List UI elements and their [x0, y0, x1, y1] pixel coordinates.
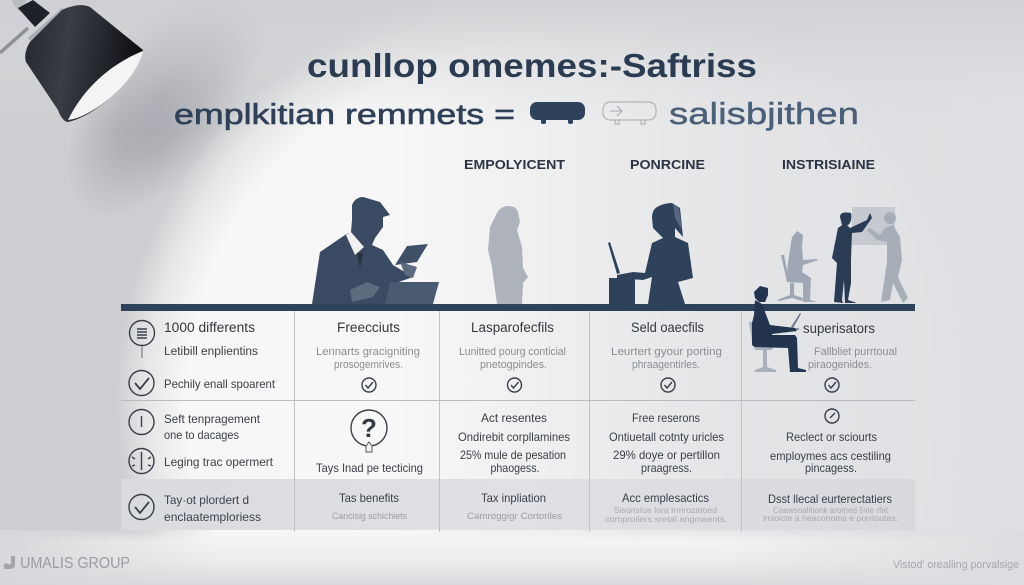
figure: seated grey woman — [777, 231, 818, 302]
icon: check — [129, 370, 154, 396]
icon: check — [362, 378, 376, 392]
cell note: Caewsoalitionk aromed 5vie rfat — [773, 505, 889, 515]
cell note: lmioicte a heaconoms e porrtoutes. — [763, 513, 898, 523]
icon: filled pill — [530, 102, 585, 124]
heading: column 3: INSTRISIAINE — [782, 157, 875, 172]
column: insurance — [605, 320, 727, 524]
cell text: prosogemrives. — [334, 359, 403, 371]
cell text: employmes acs cestiling — [770, 449, 891, 463]
column: pension — [458, 320, 570, 522]
logo text: UMALIS GROUP — [20, 555, 130, 572]
icon: check — [661, 378, 675, 392]
row labels column — [129, 320, 276, 524]
shelf bar — [121, 304, 915, 311]
icon: question mark: ? — [361, 413, 377, 443]
cell heading: Lasparofecfils — [471, 320, 554, 335]
icon: outline pill with arrow — [603, 102, 656, 124]
label: dacages: one to dacages — [164, 428, 239, 442]
label: differents: 1000 differents — [164, 320, 255, 335]
cell text: Lennarts gracigniting — [316, 346, 420, 358]
label: tenpragement: Seft tenpragement — [164, 412, 261, 426]
cell text: praagress. — [641, 461, 692, 475]
cell text: pnetogpindes. — [480, 359, 547, 371]
column headings — [464, 157, 875, 172]
icon: clock — [129, 448, 154, 474]
cell heading: Dsst llecal eurterectatiers — [768, 492, 892, 506]
label: spoarent: Pechily enall spoarent — [164, 377, 276, 391]
cell heading: Seld oaecfils — [631, 320, 704, 335]
icon: list — [130, 320, 154, 358]
subtitle: right: salisbjithen — [669, 96, 859, 131]
cell note: Camroggigr Cortoriles — [467, 511, 562, 522]
cell heading: Freecciuts — [337, 320, 400, 335]
vertical rules — [294, 311, 742, 532]
cell text: Reclect or sciourts — [786, 430, 877, 444]
cell text: phaogess. — [490, 461, 540, 475]
cell note: comproilers sretal angmaents. — [605, 514, 727, 524]
cell text: 25% mule de pesation — [460, 448, 566, 462]
figure: seated man at laptop — [749, 286, 806, 372]
icon: info — [129, 410, 154, 434]
column: employment — [316, 320, 423, 522]
cell note: Cancisig schichiets — [332, 511, 407, 522]
icon: question mark — [351, 410, 387, 452]
footer note: Vistod' orealling porvalsige — [893, 559, 1019, 571]
icon: check — [825, 378, 839, 392]
figure: whiteboard — [852, 207, 895, 245]
figure: woman at laptop — [608, 203, 693, 304]
horizontal rule — [121, 400, 915, 401]
cell text: Tays Inad pe tecticing — [316, 461, 423, 475]
cell heading: Acc emplesactics — [622, 491, 709, 505]
figure: standing grey man — [867, 212, 908, 303]
title: cunllop omemes:-Saftriss — [307, 47, 757, 84]
cell text: pincagess. — [805, 461, 857, 475]
icon: gauge — [825, 409, 839, 423]
table: comparison grid — [121, 304, 915, 532]
icon: logo mark — [4, 556, 15, 569]
figure: grey woman — [488, 206, 528, 304]
cell heading: Tax inpliation — [481, 491, 546, 505]
label: opermert: Leging trac opermert — [164, 455, 274, 469]
cell text: Lunitted pourg conticial — [459, 346, 566, 358]
heading: column 2: PONRCINE — [630, 157, 705, 172]
heading: column 1: EMPOLYICENT — [464, 157, 565, 172]
label: enplientins: Letibill enplientins — [164, 346, 258, 358]
figure: man with tablet — [312, 197, 439, 304]
cell text: Ontiuetall cotnty uricles — [609, 430, 724, 444]
cell text: phraagentirles. — [632, 359, 700, 371]
label: enclaatemploriess: enclaatemploriess — [164, 510, 261, 524]
subtitle: left: emplkitian remmets = — [174, 99, 515, 131]
label: plordert: Tay·ot plordert d — [164, 493, 249, 507]
cell heading: Tas benefits — [339, 491, 399, 505]
cell text: Act resentes — [481, 411, 547, 425]
icon: check in band — [129, 494, 154, 520]
cell text: piraogenides. — [808, 359, 872, 371]
cell text: Ondirebit corpllamines — [458, 430, 570, 444]
cell text: Fallbliet purrtoual — [814, 346, 897, 358]
cell text: Leurtert gyour porting — [611, 346, 722, 358]
icon: desk lamp — [0, 0, 143, 122]
figure: standing dark man — [832, 212, 872, 303]
column: supervisors — [763, 321, 898, 523]
cell text: Free reserons — [632, 411, 700, 425]
cell note: Sisonstue lora Irmrozatoed — [614, 505, 717, 515]
icon: check — [508, 378, 522, 392]
cell heading: superisators — [803, 321, 875, 336]
cell text: 29% doye or pertillon — [613, 448, 720, 462]
footer logo — [4, 555, 130, 572]
highlighted band — [121, 479, 915, 530]
